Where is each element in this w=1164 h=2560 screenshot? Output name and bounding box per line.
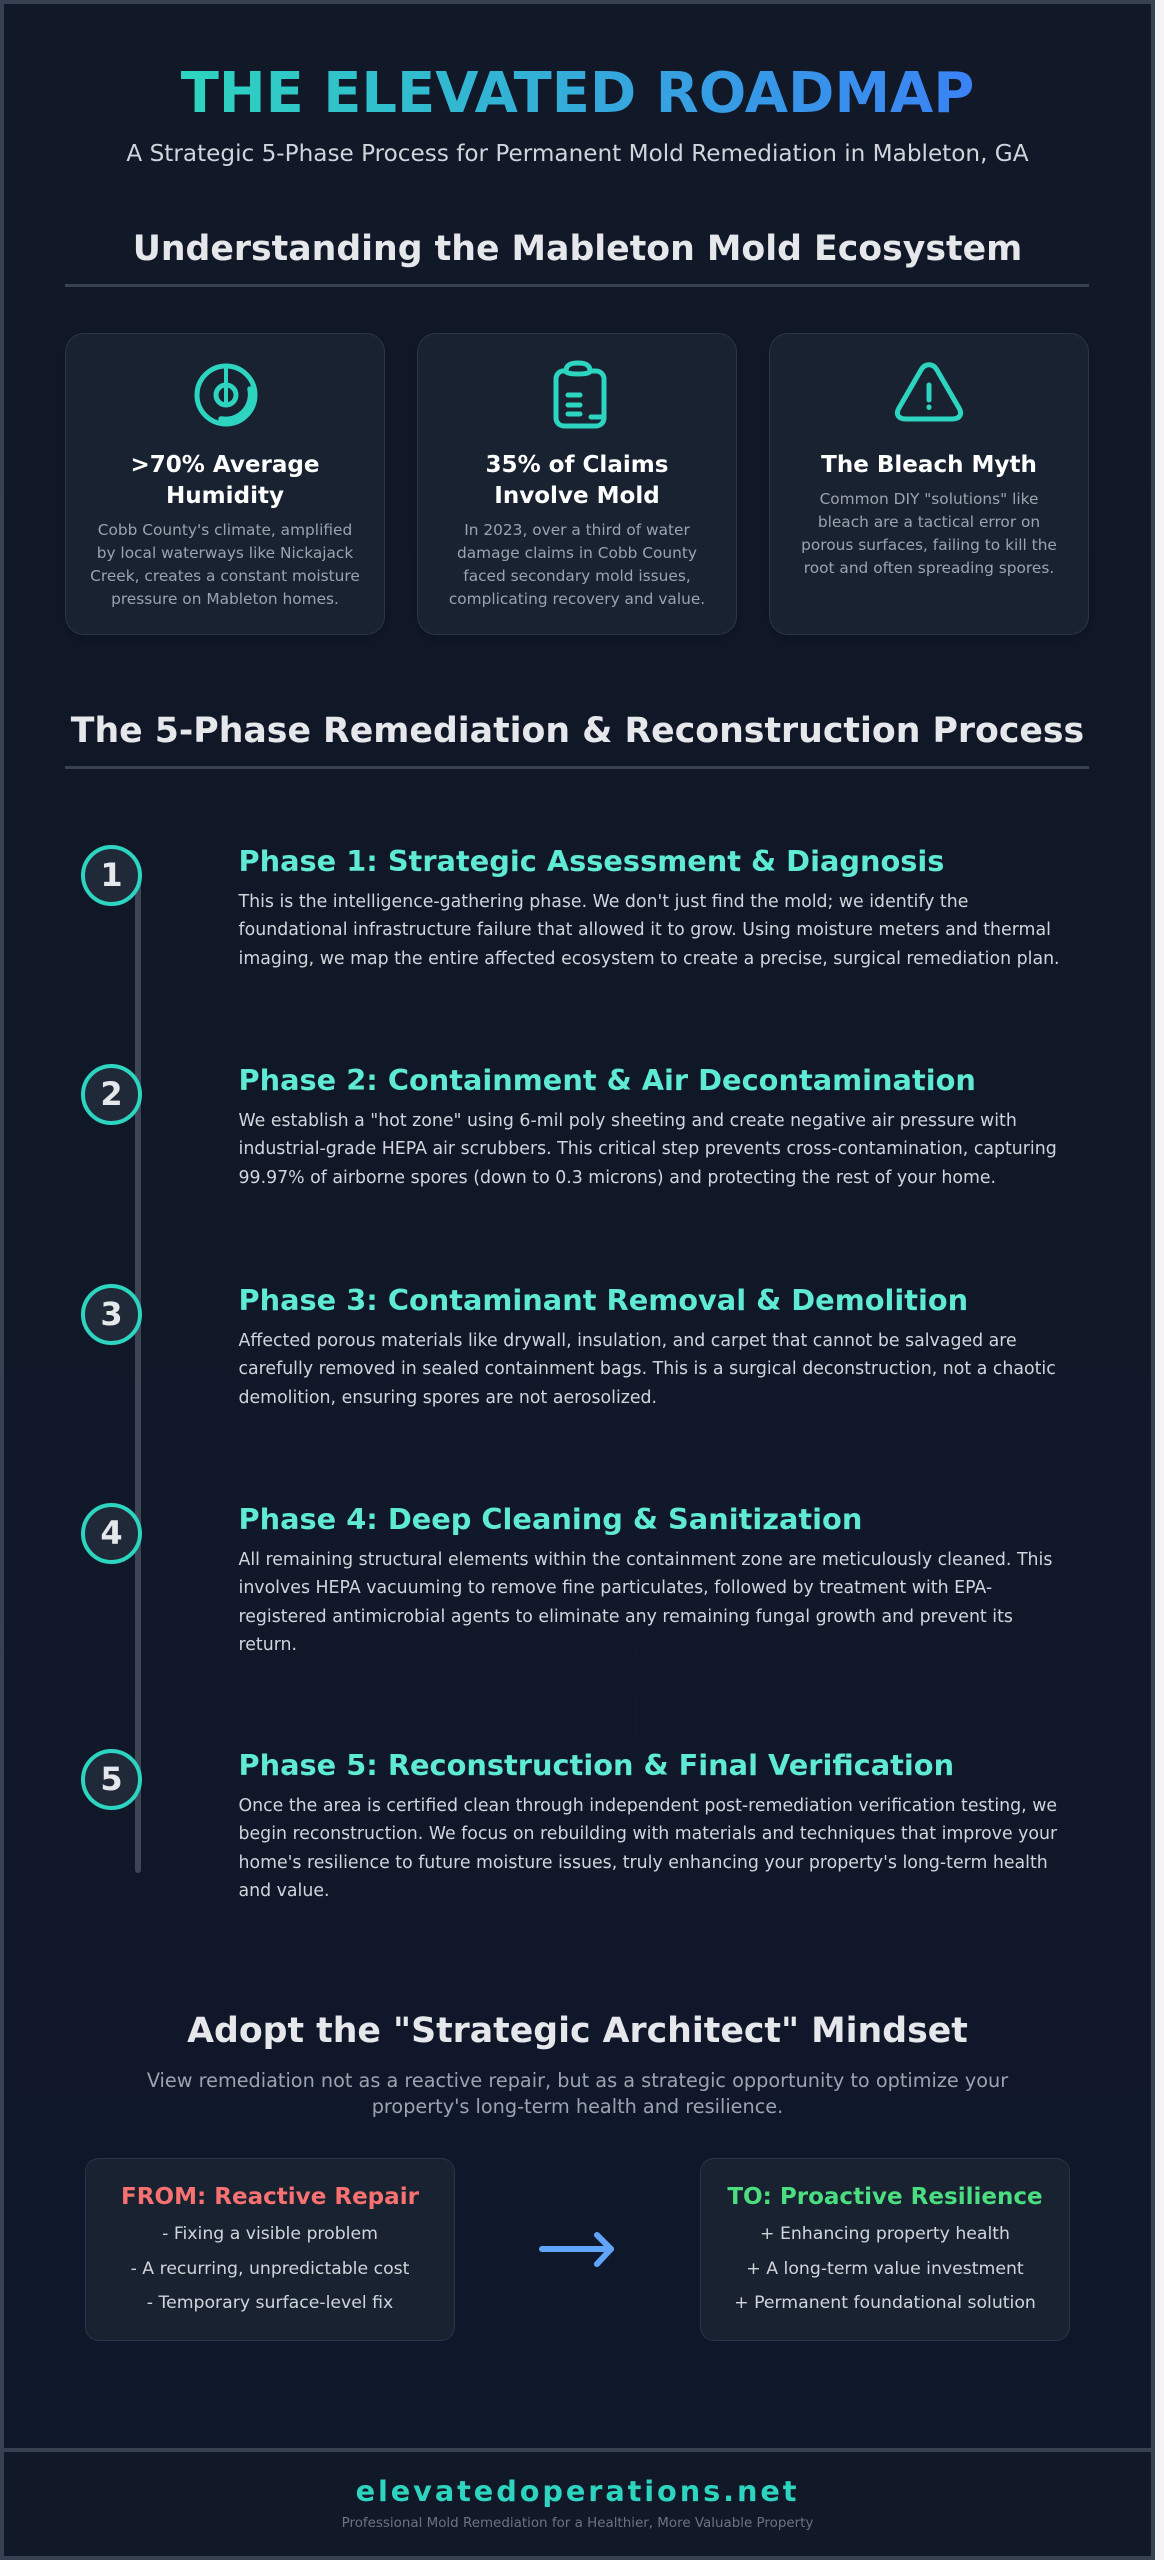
panel: bleach card (769, 333, 1089, 635)
card heading: Humidity (166, 483, 284, 509)
phase 5: 5 (100, 1760, 123, 1798)
phase 3: 3 (100, 1295, 123, 1333)
card text: Creek, creates a constant moisture (90, 567, 360, 585)
card heading: >70% Average (130, 452, 320, 478)
card text: damage claims in Cobb County (457, 544, 697, 562)
phase 2 (81, 1063, 1057, 1188)
phase 5 text: and value. (238, 1881, 330, 1901)
from list (131, 2224, 409, 2313)
card text: complicating recovery and value. (449, 590, 705, 608)
phase 1 text: This is the intelligence-gathering phase. We don't just find the mold; we identify the (238, 892, 968, 912)
phase 4 text: All remaining structural elements within the containment zone are meticulously cleaned. This (238, 1550, 1052, 1570)
phase 5 heading: Phase 5: Reconstruction & Final Verification (238, 1748, 954, 1782)
phase 1 (81, 844, 1060, 969)
subtitle: A Strategic 5-Phase Process for Permanent Mold Remediation in Mableton, GA (126, 141, 1029, 167)
phase 2: 2 (100, 1075, 123, 1113)
panel: humidity card (65, 333, 385, 635)
card text: bleach are a tactical error on (818, 513, 1040, 531)
card text: Common DIY "solutions" like (820, 490, 1038, 508)
phase 1 text: imaging, we map the entire affected ecosystem to create a precise, surgical remediation plan. (238, 949, 1060, 969)
phase 4 heading: Phase 4: Deep Cleaning & Sanitization (238, 1502, 862, 1536)
to list: + Permanent foundational solution (734, 2293, 1036, 2313)
card text: faced secondary mold issues, (463, 567, 691, 585)
phase 5 text (238, 1796, 1058, 1901)
from list: - A recurring, unpredictable cost (131, 2259, 409, 2279)
card heading: The Bleach Myth (821, 452, 1037, 478)
panel: to proactive resilience (700, 2158, 1070, 2341)
heading: process: The 5-Phase Remediation & Reconstruction Process (71, 711, 1084, 751)
card heading (130, 452, 320, 509)
mindset subtitle: View remediation not as a reactive repair, but as a strategic opportunity to optimize your (147, 2069, 1008, 2092)
phase 5 text: home's resilience to future moisture issues, truly enhancing your property's long-term health (238, 1853, 1048, 1873)
phase 5 text: begin reconstruction. We focus on rebuilding with materials and techniques that improve your (238, 1824, 1057, 1844)
to heading: TO: Proactive Resilience (727, 2184, 1043, 2210)
card text: In 2023, over a third of water (464, 521, 690, 539)
heading: ecosystem: Understanding the Mableton Mold Ecosystem (133, 229, 1022, 269)
title: THE ELEVATED ROADMAP (181, 61, 974, 126)
mindset subtitle (147, 2069, 1008, 2118)
icon: warning triangle (894, 362, 964, 422)
phase 1 text (238, 892, 1060, 969)
phase 1 text: foundational infrastructure failure that allowed it to grow. Using moisture meters and thermal (238, 920, 1051, 940)
phase 4 (81, 1502, 1052, 1655)
from heading: FROM: Reactive Repair (121, 2184, 419, 2210)
phase 3 text: Affected porous materials like drywall, insulation, and carpet that cannot be salvaged are (238, 1331, 1017, 1351)
phase 2 text: industrial-grade HEPA air scrubbers. This critical step prevents cross-contamination, capturing (238, 1139, 1057, 1159)
to list (734, 2224, 1036, 2313)
heading: mindset: Adopt the "Strategic Architect" Mindset (187, 2011, 968, 2051)
card text: porous surfaces, failing to kill the (801, 536, 1057, 554)
card text (801, 490, 1057, 577)
card heading: 35% of Claims (486, 452, 668, 478)
from list: - Fixing a visible problem (162, 2224, 378, 2244)
phase 5 (81, 1748, 1058, 1901)
phase 2 text: We establish a "hot zone" using 6-mil poly sheeting and create negative air pressure with (238, 1111, 1017, 1131)
phase 1 heading: Phase 1: Strategic Assessment & Diagnosis (238, 844, 944, 878)
phase 4: 4 (100, 1514, 123, 1552)
card text (90, 521, 360, 608)
footer website: elevatedoperations.net (356, 2474, 799, 2508)
phase 3 (81, 1283, 1056, 1408)
phase 4 text: involves HEPA vacuuming to remove fine particulates, followed by treatment with EPA- (238, 1578, 992, 1598)
phase 5 text: Once the area is certified clean through independent post-remediation verification testing, we (238, 1796, 1057, 1816)
footer (0, 2448, 1155, 2560)
phase 2 text (238, 1111, 1057, 1188)
card text: pressure on Mableton homes. (111, 590, 339, 608)
card text: Cobb County's climate, amplified (98, 521, 352, 539)
panel: claims card (417, 333, 737, 635)
phase 3 heading: Phase 3: Contaminant Removal & Demolition (238, 1283, 968, 1317)
card text: root and often spreading spores. (804, 559, 1054, 577)
icon: humidity gauge (194, 364, 258, 426)
panel: from reactive repair (85, 2158, 455, 2341)
arrow (539, 2232, 614, 2267)
mindset subtitle: property's long-term health and resilience. (372, 2095, 783, 2118)
phase 4 text: return. (238, 1635, 297, 1655)
icon: clipboard (554, 360, 606, 428)
card heading: Involve Mold (494, 483, 660, 509)
timeline line (135, 880, 141, 1873)
to list: + A long-term value investment (746, 2259, 1024, 2279)
card heading (486, 452, 668, 509)
phase 4 text: registered antimicrobial agents to eliminate any remaining fungal growth and prevent its (238, 1607, 1013, 1627)
footer tagline: Professional Mold Remediation for a Healthier, More Valuable Property (342, 2516, 813, 2531)
card text (449, 521, 705, 608)
phase 3 text: demolition, ensuring spores are not aerosolized. (238, 1388, 657, 1408)
phase 1: 1 (100, 856, 123, 894)
phase 4 text (238, 1550, 1052, 1655)
phase 2 heading: Phase 2: Containment & Air Decontamination (238, 1063, 976, 1097)
phase 3 text: carefully removed in sealed containment bags. This is a surgical deconstruction, not a chaotic (238, 1359, 1056, 1379)
to list: + Enhancing property health (760, 2224, 1010, 2244)
phase 3 text (238, 1331, 1056, 1408)
card text: by local waterways like Nickajack (97, 544, 353, 562)
from list: - Temporary surface-level fix (147, 2293, 393, 2313)
phase 2 text: 99.97% of airborne spores (down to 0.3 microns) and protecting the rest of your home. (238, 1168, 996, 1188)
